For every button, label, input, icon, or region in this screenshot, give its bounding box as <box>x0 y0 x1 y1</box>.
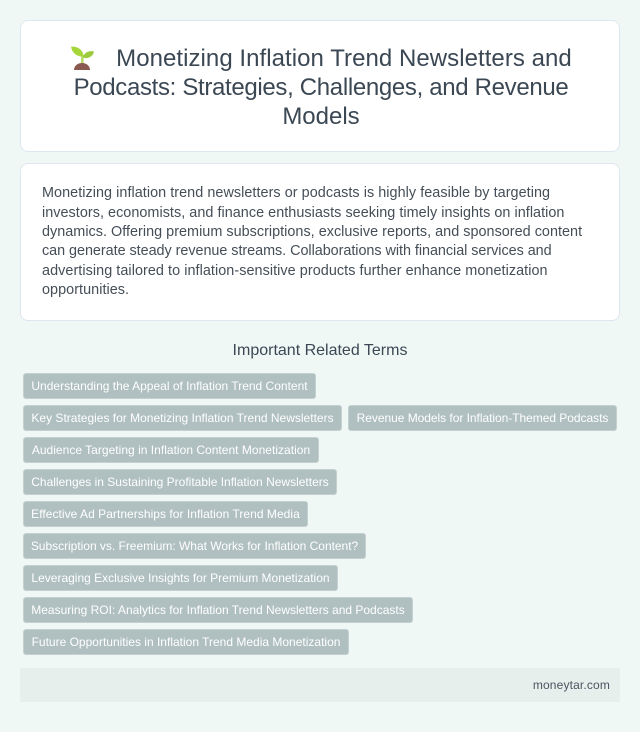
tag 1 <box>23 373 316 399</box>
title text <box>74 45 572 130</box>
tag 8 <box>23 565 338 591</box>
title card <box>20 20 620 152</box>
title card: Monetizing Inflation Trend Newsletters and <box>116 45 572 72</box>
tag 2 <box>23 405 342 431</box>
icon: seedling <box>71 46 94 70</box>
tag 9 <box>23 597 413 623</box>
summary card: Monetizing inflation trend newsletters or podcasts is highly feasible by targeting <box>42 185 550 201</box>
tag 10 <box>23 629 349 655</box>
tag 6: Effective Ad Partnerships for Inflation Trend Media <box>31 507 300 521</box>
tag 5 <box>23 469 337 495</box>
tag 2: Key Strategies for Monetizing Inflation Trend Newsletters <box>31 411 334 425</box>
footer bar <box>20 668 620 702</box>
summary text <box>42 185 582 298</box>
tag 7 <box>23 533 366 559</box>
tag 6 <box>23 501 308 527</box>
summary card: investors, economists, and finance enthusiasts seeking timely insights on inflation <box>42 205 564 221</box>
summary card: opportunities. <box>42 282 129 298</box>
footer source: moneytar.com <box>533 678 610 692</box>
summary card: advertising tailored to inflation-sensitive products further enhance monetization <box>42 263 548 279</box>
summary card: can generate steady revenue streams. Collaborations with financial services and <box>42 243 552 259</box>
title card: Models <box>282 103 360 130</box>
section heading: Important Related Terms <box>233 342 407 359</box>
title card: Podcasts: Strategies, Challenges, and Revenue <box>74 74 568 101</box>
tag 5: Challenges in Sustaining Profitable Inflation Newsletters <box>31 475 329 489</box>
tag 7: Subscription vs. Freemium: What Works for Inflation Content? <box>31 539 358 553</box>
tag 10: Future Opportunities in Inflation Trend Media Monetization <box>32 635 340 649</box>
summary card: dynamics. Offering premium subscriptions, exclusive reports, and sponsored content <box>42 224 582 240</box>
summary card <box>20 163 620 321</box>
tag 8: Leveraging Exclusive Insights for Premium Monetization <box>31 571 330 585</box>
tag 4: Audience Targeting in Inflation Content Monetization <box>32 443 310 457</box>
tag 3: Revenue Models for Inflation-Themed Podcasts <box>357 411 608 425</box>
tag 4 <box>23 437 319 463</box>
tag 3 <box>348 405 617 431</box>
tag 1: Understanding the Appeal of Inflation Trend Content <box>31 379 308 393</box>
related terms list <box>23 373 617 655</box>
tag 9: Measuring ROI: Analytics for Inflation Trend Newsletters and Podcasts <box>31 603 405 617</box>
